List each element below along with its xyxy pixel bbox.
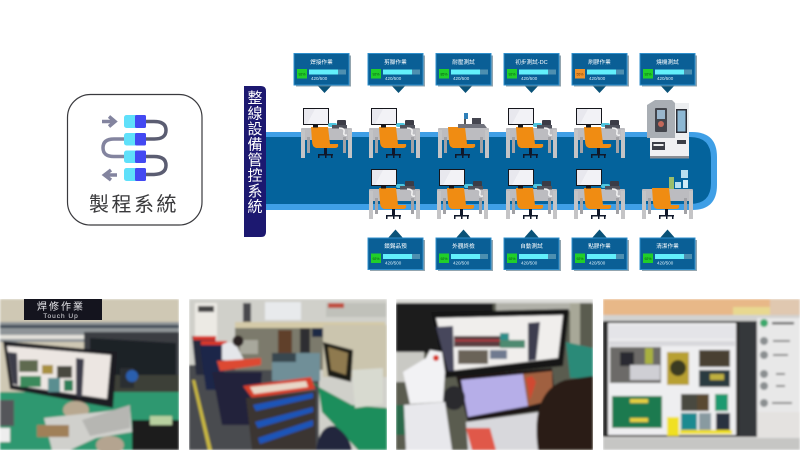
station 5 bbox=[574, 108, 625, 158]
card: 鎖錫品預: 420/500 bbox=[385, 260, 402, 266]
vertical title: 管 bbox=[247, 151, 263, 169]
card: 焊接作業: 92% bbox=[298, 72, 306, 76]
station 9 bbox=[506, 169, 557, 219]
card: 點膠作業: 點膠作業 bbox=[588, 242, 611, 250]
icon caption: 製程系統 bbox=[89, 193, 179, 216]
card: 點膠作業: 420/500 bbox=[589, 260, 606, 266]
status cards bottom bbox=[368, 230, 697, 271]
conveyor band bbox=[262, 132, 717, 210]
card: 自動測試 bbox=[504, 230, 561, 271]
card: 外觀終檢: 92% bbox=[440, 257, 448, 261]
photo: operator with laptop bbox=[396, 299, 593, 450]
card: 刷膠作業: 刷膠作業 bbox=[588, 58, 611, 66]
station 10 bbox=[574, 169, 625, 219]
card: 初步測試-DC: 初步測試-DC bbox=[515, 58, 548, 66]
card: 初步測試-DC: 92% bbox=[508, 72, 516, 76]
card: 刷膠作業: 55% bbox=[576, 72, 584, 76]
card: 鎖錫品預: 鎖錫品預 bbox=[384, 242, 407, 250]
vertical title: 統 bbox=[247, 198, 263, 216]
photo: work instruction screen bbox=[603, 299, 800, 450]
station 8 bbox=[437, 169, 488, 219]
photo sign: Touch Up bbox=[43, 313, 79, 320]
vertical title: 控 bbox=[247, 168, 263, 184]
card: 焊接作業: 焊接作業 bbox=[310, 58, 333, 66]
vertical title: 系 bbox=[247, 183, 263, 200]
card: 耐壓測試 bbox=[436, 54, 493, 93]
card: 鎖錫品預: 92% bbox=[372, 257, 380, 261]
card: 外觀終檢: 外觀終檢 bbox=[452, 242, 475, 250]
station 3: hipot tester bbox=[438, 113, 489, 158]
card: 燒機測試: 420/500 bbox=[657, 76, 674, 81]
photo: production line racks bbox=[189, 299, 387, 450]
card: 自動測試: 自動測試 bbox=[520, 242, 543, 250]
vertical title bbox=[244, 86, 266, 237]
card: 外觀終檢 bbox=[436, 230, 493, 271]
bottom stations bbox=[369, 169, 693, 219]
card: 剪腳作業: 92% bbox=[372, 72, 380, 76]
top stations bbox=[301, 100, 689, 158]
vertical title: 整 bbox=[247, 90, 263, 107]
card: 焊接作業 bbox=[294, 54, 351, 93]
station 11: cleaning bbox=[642, 170, 693, 219]
vertical title: 設 bbox=[247, 121, 263, 138]
card: 點膠作業: 92% bbox=[576, 257, 584, 261]
card: 自動測試: 92% bbox=[508, 257, 516, 261]
card: 燒機測試 bbox=[640, 54, 697, 93]
station 2 bbox=[369, 108, 420, 158]
status cards top bbox=[294, 54, 697, 93]
card: 耐壓測試: 耐壓測試 bbox=[452, 58, 475, 66]
photo sign bbox=[24, 299, 102, 320]
process system icon card bbox=[68, 94, 202, 225]
vertical title: 備 bbox=[247, 136, 263, 154]
card: 燒機測試: 燒機測試 bbox=[656, 58, 679, 66]
icon: process flow bbox=[102, 115, 166, 181]
card: 焊接作業: 420/500 bbox=[311, 76, 328, 81]
card: 刷膠作業: 420/500 bbox=[589, 76, 606, 81]
photo: touch-up workstation bbox=[0, 299, 179, 450]
card: 自動測試: 420/500 bbox=[521, 260, 538, 266]
station 7 bbox=[369, 169, 420, 219]
card: 初步測試-DC: 420/500 bbox=[521, 76, 538, 81]
card: 鎖錫品預 bbox=[368, 230, 425, 271]
card: 剪腳作業 bbox=[368, 54, 425, 93]
card: 耐壓測試: 85% bbox=[440, 72, 448, 76]
vertical title: 線 bbox=[247, 106, 263, 122]
photo sign: 焊修作業 bbox=[37, 300, 85, 313]
card: 剪腳作業: 剪腳作業 bbox=[384, 58, 407, 66]
station 6: burn-in machine bbox=[647, 100, 689, 158]
card: 外觀終檢: 420/500 bbox=[453, 260, 470, 266]
card: 燒機測試: 92% bbox=[644, 72, 652, 76]
card: 清潔作業 bbox=[640, 230, 697, 271]
card: 耐壓測試: 420/500 bbox=[453, 76, 470, 81]
card: 清潔作業: 420/500 bbox=[657, 260, 674, 266]
station 1 bbox=[301, 108, 352, 158]
card: 清潔作業: 92% bbox=[644, 257, 652, 261]
card: 清潔作業: 清潔作業 bbox=[656, 242, 679, 250]
card: 初步測試-DC bbox=[504, 54, 561, 93]
card: 點膠作業 bbox=[572, 230, 629, 271]
card: 剪腳作業: 420/500 bbox=[385, 76, 402, 81]
station 4 bbox=[506, 108, 557, 158]
card: 刷膠作業 bbox=[572, 54, 629, 93]
